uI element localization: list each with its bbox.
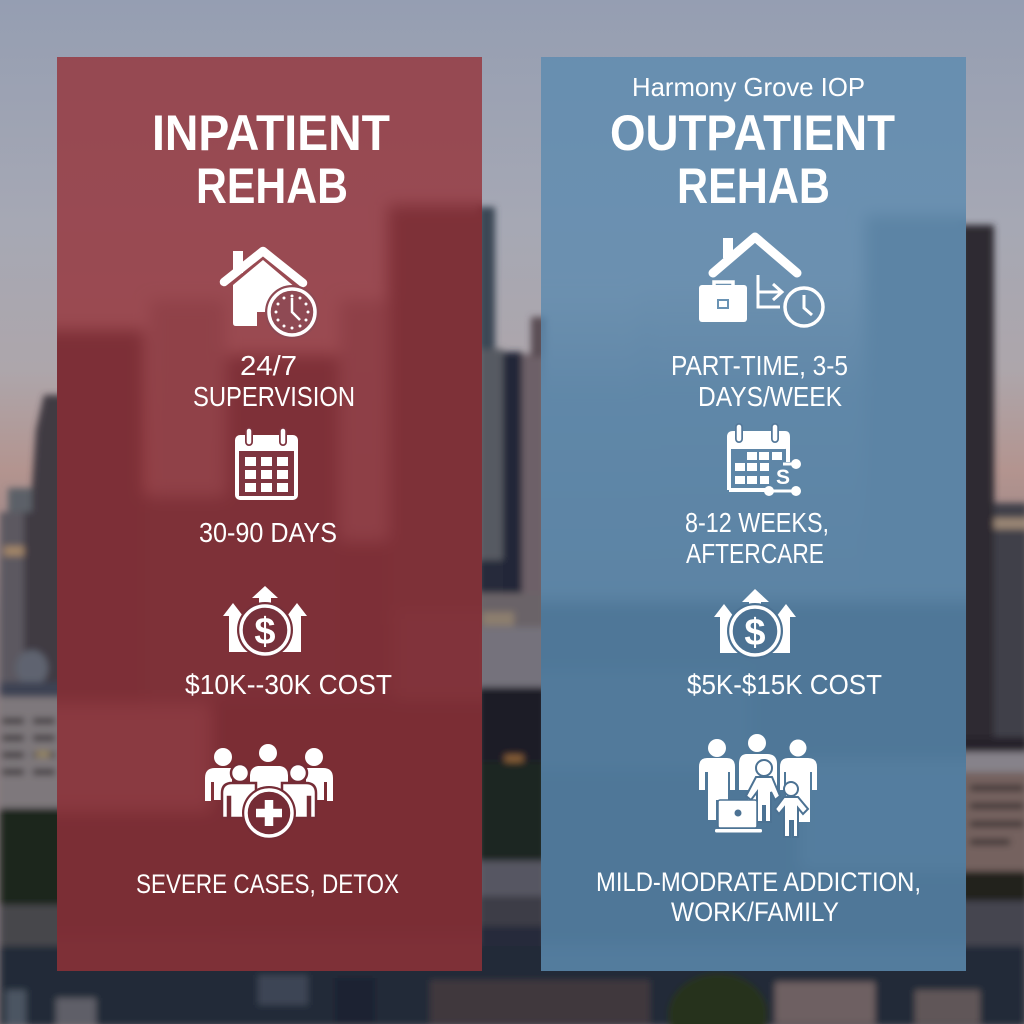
heading: inpatient rehab: INPATIENT — [152, 105, 390, 161]
text: use case — [596, 867, 921, 927]
heading: inpatient rehab: REHAB — [196, 158, 348, 214]
text: cost: $10K--30K COST — [185, 669, 392, 700]
heading: outpatient rehab: REHAB — [677, 158, 830, 214]
text: cost: $5K-$15K COST — [687, 669, 882, 700]
heading: inpatient rehab — [152, 105, 390, 214]
text: use case: WORK/FAMILY — [671, 897, 839, 927]
text: duration: 30-90 DAYS — [199, 517, 337, 548]
text: 24/7 supervision — [193, 350, 355, 412]
icon: rising cost: $ — [744, 612, 766, 654]
panel: inpatient rehab — [57, 57, 482, 971]
icon: house, briefcase and clock — [699, 237, 823, 326]
icon: house with clock — [224, 251, 319, 339]
text: schedule — [671, 350, 848, 412]
icon: medical group — [205, 744, 333, 840]
icon: calendar with cost nodes: S — [776, 466, 790, 489]
icon: family with laptop — [699, 734, 817, 837]
text: duration: AFTERCARE — [686, 538, 824, 569]
text: 24/7 supervision: 24/7 — [240, 350, 297, 381]
heading: outpatient rehab — [610, 105, 895, 214]
text: use case: MILD-MODRATE ADDICTION, — [596, 867, 921, 897]
panel: outpatient rehab — [541, 57, 966, 971]
icon: calendar — [235, 431, 298, 500]
text: use case: SEVERE CASES, DETOX — [136, 869, 399, 899]
icon: rising cost: $ — [254, 611, 276, 653]
heading: outpatient rehab: OUTPATIENT — [610, 105, 895, 161]
text: duration: 8-12 WEEKS, — [685, 507, 829, 538]
label: program name: Harmony Grove IOP — [632, 72, 865, 102]
text: 24/7 supervision: SUPERVISION — [193, 381, 355, 412]
text: duration — [685, 507, 829, 569]
text: schedule: PART-TIME, 3-5 — [671, 350, 848, 381]
icon: rising cost — [714, 589, 796, 659]
text: schedule: DAYS/WEEK — [698, 381, 842, 412]
icon: calendar with cost nodes — [727, 427, 801, 496]
icon: rising cost — [223, 586, 307, 658]
